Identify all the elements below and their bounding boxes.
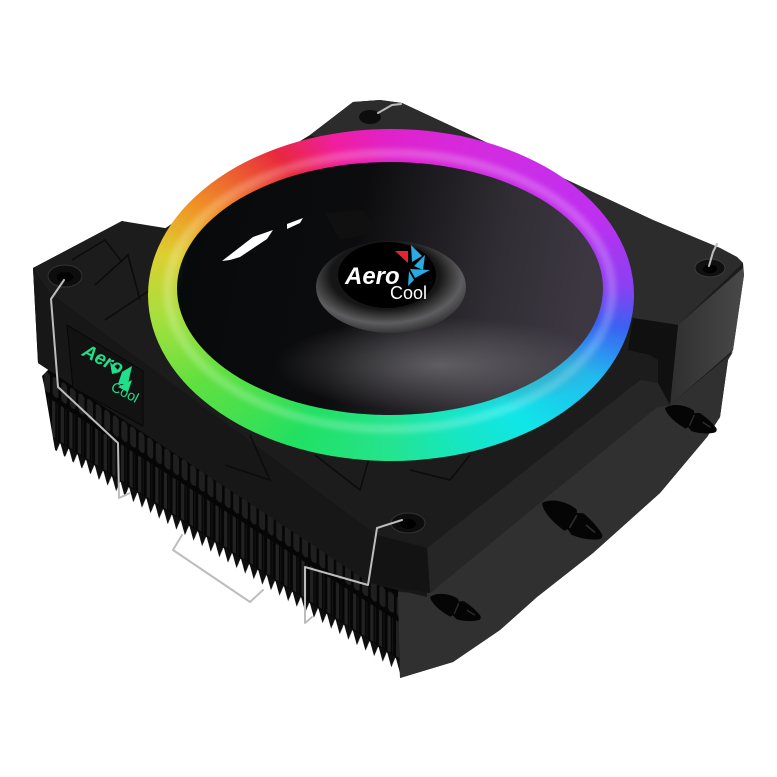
wire front — [305, 520, 402, 623]
product illustration: RGB CPU cooler — [33, 100, 744, 678]
hub logo text: Cool — [390, 283, 427, 303]
heatsink fins — [40, 360, 405, 685]
white highlight streaks — [222, 218, 303, 261]
front corner mounting hole — [391, 513, 425, 533]
screw right — [661, 399, 721, 440]
hub logo disc — [338, 242, 436, 308]
badge text — [78, 340, 142, 406]
badge text: Aero — [78, 340, 127, 379]
top plate and side face — [33, 221, 640, 597]
corner mounting hole right — [695, 259, 725, 277]
wire left — [51, 280, 130, 498]
cooler body base silhouette — [33, 100, 744, 678]
wire handle — [173, 535, 263, 602]
ring light band — [168, 153, 612, 429]
steel retention wires — [51, 104, 717, 623]
screw front — [426, 588, 484, 628]
hub logo text: Aero — [344, 263, 400, 290]
badge text: Cool — [109, 378, 142, 406]
wire top — [378, 104, 401, 113]
right side faces — [398, 268, 744, 678]
rainbow LED ring — [148, 129, 634, 461]
hub logo text — [344, 263, 427, 303]
blade sheen — [275, 317, 605, 413]
embossed pattern on plate — [72, 240, 470, 490]
fan blades — [177, 162, 605, 415]
side badge with green logo — [67, 325, 143, 426]
left corner mounting hole — [48, 265, 82, 287]
fan hub with logo — [316, 241, 466, 333]
faint strut shape behind blades — [325, 210, 380, 240]
screw middle — [536, 492, 608, 549]
corner mounting hole top — [359, 110, 381, 124]
mounting screws — [426, 399, 721, 628]
wire right — [709, 244, 717, 266]
upper frame corner — [310, 100, 743, 325]
hub logo star — [395, 245, 430, 286]
